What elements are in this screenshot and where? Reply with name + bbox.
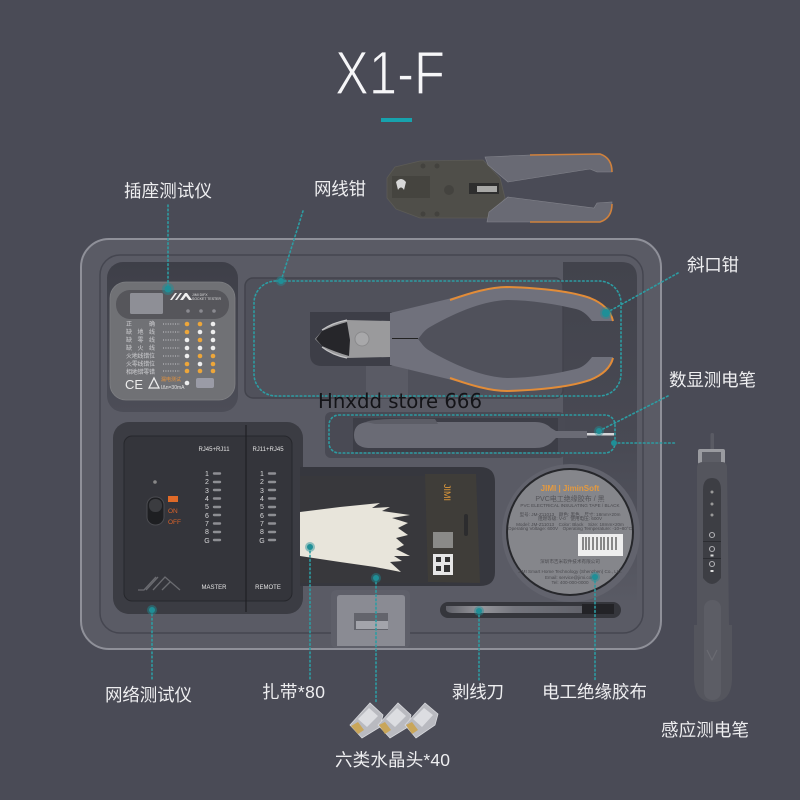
icon: network cable tester: [113, 422, 303, 614]
socket tester indicator lights: [185, 322, 215, 373]
icon: induction voltage tester pen: [694, 433, 732, 702]
port numbers: 7: [205, 521, 209, 528]
port numbers: 3: [205, 488, 209, 495]
icon: network cable tester: MASTER: [201, 585, 227, 591]
icon: insulating tape roll: Tel: 400-000-0000: [551, 580, 589, 585]
socket tester status labels: 缺 零 线: [126, 336, 155, 344]
title accent bar: [381, 118, 412, 122]
power switch: [147, 497, 164, 525]
icon: insulating tape roll: PVC电工绝缘胶布 / 黑: [535, 494, 605, 503]
port numbers: 4: [205, 496, 209, 503]
port numbers: 1: [205, 471, 209, 478]
icon: RJ45 connectors: [350, 703, 438, 738]
port numbers: 6: [205, 513, 209, 520]
icon: network cable tester: OFF: [168, 519, 181, 526]
callout outlines: [254, 281, 621, 453]
port numbers: 1: [260, 471, 264, 478]
socket tester status labels: 缺 地 线: [126, 328, 155, 336]
port numbers: 7: [260, 521, 264, 528]
port numbers: 8: [260, 529, 264, 536]
port numbers: 5: [260, 504, 264, 511]
label: crimping pliers: 网线钳: [314, 179, 366, 199]
label: socket tester: 插座测试仪: [124, 181, 212, 201]
port numbers: 5: [205, 504, 209, 511]
icon: case clasp: [331, 590, 410, 648]
icon: socket tester: IΔn=30mA: [161, 385, 185, 391]
icon: cable ties package: JIMI: [442, 484, 452, 501]
label: digital voltage pen: 数显测电笔: [669, 370, 756, 390]
label: cable ties: 扎带*80: [262, 682, 325, 702]
label: insulating tape: 电工绝缘胶布: [542, 682, 647, 702]
socket tester status labels: [126, 320, 155, 376]
panel: tool case: [81, 239, 661, 649]
icon: cable ties package: [300, 467, 495, 586]
port indicator lights: [214, 474, 275, 540]
icon: insulating tape roll: PVC ELECTRICAL INSULATING TAPE / BLACK: [520, 503, 620, 508]
label: network tester: 网络测试仪: [105, 685, 192, 705]
icon: network cable tester: REMOTE: [255, 585, 281, 591]
icon: insulating tape roll: JIMI | JiminSoft: [541, 484, 600, 493]
icon: insulating tape roll: 深圳市吉米软件技术有限公司: [540, 558, 600, 565]
label: RJ45 connectors: 六类水晶头*40: [335, 750, 450, 770]
label: diagonal pliers: 斜口钳: [687, 255, 739, 275]
port numbers: 6: [260, 513, 264, 520]
icon: wire stripper: [440, 602, 621, 618]
watermark: Hnxdd store 666: [318, 389, 482, 413]
icon: insulating tape roll: Model: JM-Z11013 Color: Black Size: 18mm×20m: [516, 522, 624, 527]
port numbers: G: [259, 538, 265, 545]
panel: socket tester tray: [107, 262, 238, 412]
icon: insulating tape roll: 型号: JM-Z11013 颜色: 黑色 尺寸: 18mm×20m: [520, 511, 621, 518]
icon: insulating tape roll: 阻燃等级: V-0 使用电压: 600V: [538, 515, 603, 522]
icon: insulating tape roll: Email: service@jimi.com: [545, 575, 595, 580]
icon: diagonal pliers: [315, 287, 613, 391]
port numbers: G: [204, 538, 210, 545]
icon: socket tester: SOCKET TESTER: [192, 297, 222, 301]
title: X1-F: [335, 39, 445, 107]
port numbers: 8: [205, 529, 209, 536]
leader lines and markers: [147, 205, 678, 703]
socket tester status labels: 火零线错位: [126, 360, 155, 368]
socket tester status labels: 火地线错位: [126, 352, 155, 360]
icon: network cable tester: RJ11+RJ45: [252, 447, 284, 453]
port numbers: 2: [260, 479, 264, 486]
socket tester status labels: 相地错零错: [126, 368, 155, 376]
icon: insulating tape roll: Operating Voltage: 600V Operating Temperature: -10~80°C: [508, 526, 633, 531]
port numbers: [204, 471, 265, 545]
label: wire stripper: 剥线刀: [452, 682, 504, 702]
icon: network cable tester: RJ45+RJ11: [198, 447, 230, 453]
port numbers: 3: [260, 488, 264, 495]
icon: socket tester: 漏电测试: [161, 376, 181, 383]
port numbers: 4: [260, 496, 264, 503]
icon: digital voltage tester pen: [353, 418, 614, 452]
icon: crimping tool: [387, 154, 612, 222]
label: induction pen: 感应测电笔: [661, 720, 749, 740]
icon: socket tester: JIMI DIFX: [192, 293, 208, 297]
socket tester status labels: 缺 火 线: [126, 344, 155, 352]
socket tester status labels: 正 确: [126, 320, 155, 328]
port numbers: 2: [205, 479, 209, 486]
icon: network cable tester: ON: [168, 508, 178, 515]
panel: pliers tray: [245, 262, 637, 600]
icon: insulating tape roll: JIMI Smart Home Technology (Shenzhen) Co., Ltd.: [518, 569, 622, 574]
icon: socket tester: [110, 282, 235, 400]
icon: insulating tape roll: [502, 464, 640, 602]
icon: socket tester: CE: [125, 377, 143, 392]
